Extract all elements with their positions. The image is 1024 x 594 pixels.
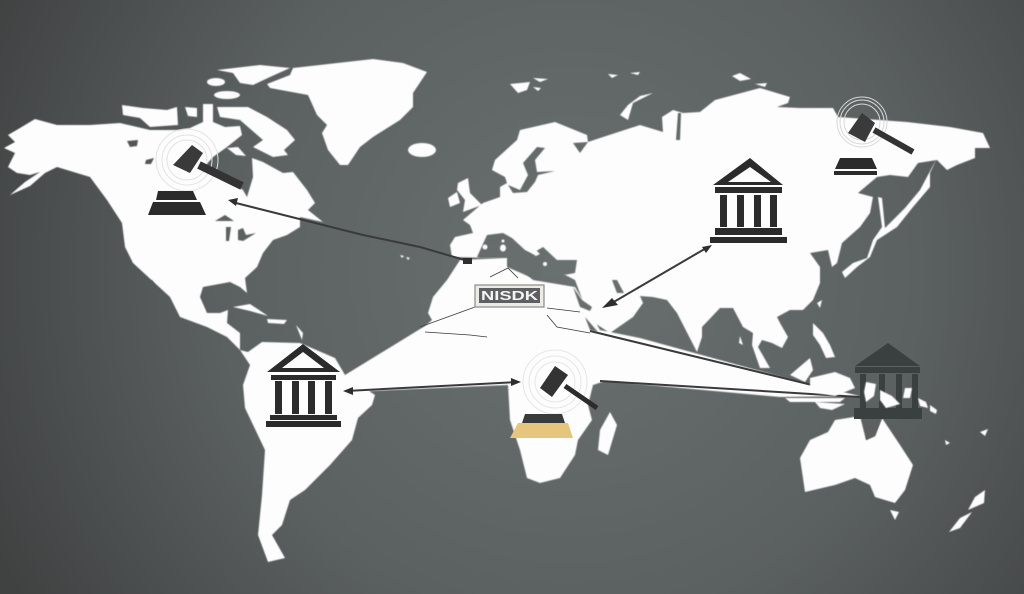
arrow: South America to Africa	[346, 382, 518, 391]
arrow: Africa to Indonesia	[600, 381, 860, 397]
North America	[4, 104, 323, 350]
Barents inlet	[573, 113, 681, 153]
icon: courthouse Asia	[710, 158, 787, 243]
Italy and Mediterranean islands	[482, 228, 547, 266]
Madagascar	[598, 412, 617, 455]
Baja gulf	[150, 280, 168, 307]
arrowheads	[228, 198, 712, 395]
Africa and connecting band	[345, 258, 860, 483]
Southeast Asia islands	[739, 300, 835, 382]
Baltic Sea	[508, 147, 555, 193]
icon: gavel North America	[148, 129, 242, 215]
Oceania small islands	[890, 429, 988, 532]
arrow: Asia to Middle East	[612, 247, 708, 303]
Indonesia islands	[785, 372, 937, 414]
Britain and Ireland	[448, 178, 482, 212]
Red Sea	[573, 287, 598, 332]
Carpentaria	[866, 418, 882, 440]
South America	[240, 342, 375, 562]
Greenland	[267, 59, 427, 165]
arrow: Indonesia to Middle East	[590, 331, 812, 385]
Caribbean islands	[233, 255, 410, 340]
crack lines	[420, 268, 590, 337]
Arctic islands	[122, 65, 295, 157]
inland seas	[127, 113, 882, 440]
Eurasia	[450, 88, 990, 368]
icon: courthouse South America	[266, 344, 341, 427]
label box	[475, 285, 544, 307]
icon: gavel Siberia	[834, 97, 913, 175]
Australia	[800, 416, 913, 503]
Kamchatka, Sakhalin and Japan	[842, 158, 937, 278]
arrow: North America to label	[232, 202, 468, 261]
icon: gavel Africa	[510, 350, 597, 438]
Great Lakes	[127, 140, 256, 241]
Mediterranean	[477, 233, 577, 280]
Arctic Eurasian islands	[510, 72, 767, 120]
icon: courthouse Indonesia	[854, 343, 922, 419]
Persian Gulf	[612, 280, 624, 293]
Iceland	[408, 143, 436, 157]
arrows	[232, 202, 860, 397]
label box: NISDK	[481, 288, 539, 303]
